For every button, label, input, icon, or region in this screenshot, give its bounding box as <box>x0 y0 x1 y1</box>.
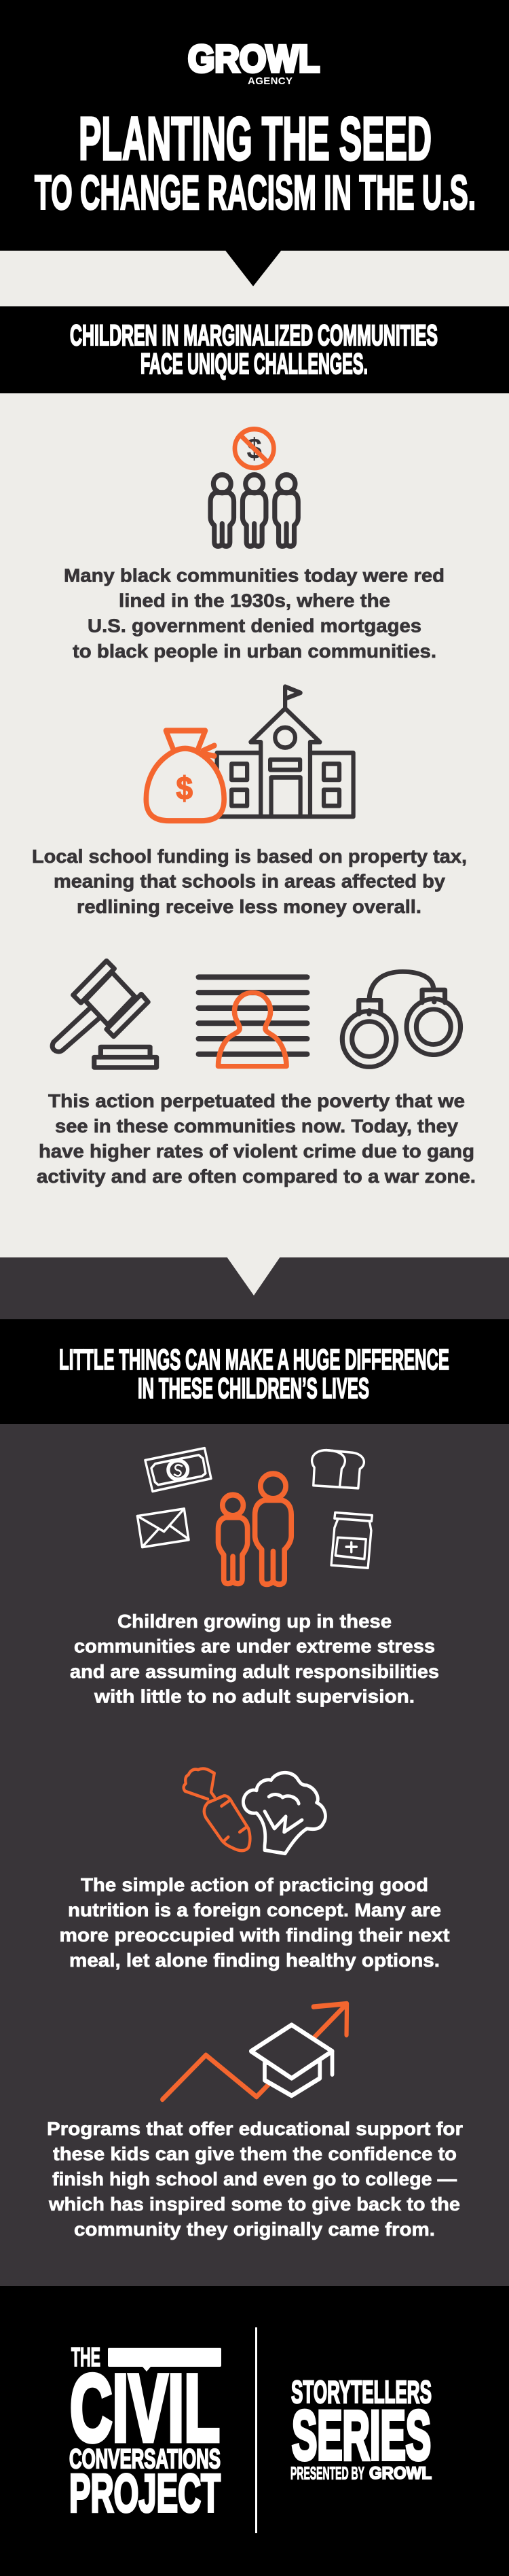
logo: Civil Conversations Project: CONVERSATIONS <box>69 2444 221 2474</box>
text: programs: Programs that offer educational support for <box>47 2118 463 2139</box>
text: programs: community they originally came from. <box>74 2219 435 2240</box>
logo: Storytellers Series: PRESENTED BY <box>290 2463 364 2484</box>
panel: footer <box>0 2286 509 2576</box>
text: stress: and are assuming adult responsibilities <box>70 1661 439 1682</box>
icon: carrot and broccoli <box>184 1769 325 1854</box>
logo: Civil Conversations Project: PROJECT <box>69 2463 221 2523</box>
text: poverty: have higher rates of violent crime due to gang <box>39 1141 474 1162</box>
text: poverty: activity and are often compared to a war zone. <box>37 1166 476 1187</box>
icon: handcuffs <box>342 971 461 1067</box>
logo: Growl Agency: AGENCY <box>248 75 293 87</box>
icon: parent and child with responsibilities <box>137 1448 372 1584</box>
text: redlining <box>64 565 445 662</box>
title <box>35 105 476 220</box>
text: programs: finish high school and even go to college — <box>52 2168 457 2189</box>
logo: Civil Conversations Project: THE <box>71 2343 100 2372</box>
text: school funding: redlining receive less money overall. <box>77 896 421 917</box>
text: nutrition: meal, let alone finding healthy options. <box>69 1950 440 1971</box>
icon: jar <box>331 1513 372 1568</box>
icon: school and money bag: $ <box>176 770 193 806</box>
logo: Civil Conversations Project: CIVIL <box>70 2355 220 2461</box>
text: redlining: U.S. government denied mortgages <box>88 615 421 636</box>
text: stress: with little to no adult supervision. <box>94 1686 415 1706</box>
text: nutrition <box>60 1874 449 1971</box>
panel: challenges <box>0 250 509 1257</box>
text: poverty: see in these communities now. Today, they <box>55 1115 458 1137</box>
text: school funding: Local school funding is based on property tax, <box>32 846 467 867</box>
text: school funding <box>32 846 467 917</box>
arrow: header pointer <box>225 250 282 287</box>
logo: Storytellers Series: GROWL <box>369 2464 432 2483</box>
text: nutrition: nutrition is a foreign concept. Many are <box>68 1899 441 1920</box>
icon: envelope <box>137 1509 189 1548</box>
text: poverty <box>37 1090 476 1187</box>
text: redlining: to black people in urban communities. <box>73 641 436 662</box>
icon: three people with no money sign <box>210 429 298 546</box>
panel: header <box>0 0 509 251</box>
heading band: challenges <box>0 306 509 393</box>
heading band: little things <box>0 1319 509 1424</box>
icon: gavel <box>52 961 157 1067</box>
text: school funding: meaning that schools in areas affected by <box>54 871 445 891</box>
icon: three people with no money sign: $ <box>246 432 262 465</box>
text: nutrition: more preoccupied with finding their next <box>60 1925 449 1946</box>
panel: little things <box>0 1257 509 2286</box>
text: stress <box>70 1611 439 1706</box>
text: poverty: This action perpetuated the poverty that we <box>48 1090 465 1111</box>
logo: Growl Agency: GROWL <box>188 37 320 80</box>
arrow: section pointer <box>227 1257 280 1295</box>
text: programs: these kids can give them the confidence to <box>53 2143 457 2164</box>
text: stress: communities are under extreme stress <box>74 1636 435 1656</box>
text: programs: which has inspired some to give back to the <box>48 2194 460 2215</box>
logo: Civil Conversations Project <box>69 2343 221 2523</box>
text: redlining: lined in the 1930s, where the <box>119 590 390 611</box>
text: nutrition: The simple action of practicing good <box>81 1874 428 1895</box>
text: stress: Children growing up in these <box>117 1611 392 1632</box>
icon: rising arrow and graduation cap <box>162 2003 347 2100</box>
icon: mugshot <box>199 977 307 1067</box>
icon: adult and child <box>219 1473 291 1584</box>
icon: bread <box>312 1450 364 1488</box>
icon: cash <box>145 1448 211 1491</box>
text: redlining: Many black communities today were red <box>64 565 445 586</box>
icon: school and money bag <box>146 687 354 821</box>
text: programs <box>47 2118 463 2240</box>
logo: Storytellers Series <box>290 2374 432 2484</box>
